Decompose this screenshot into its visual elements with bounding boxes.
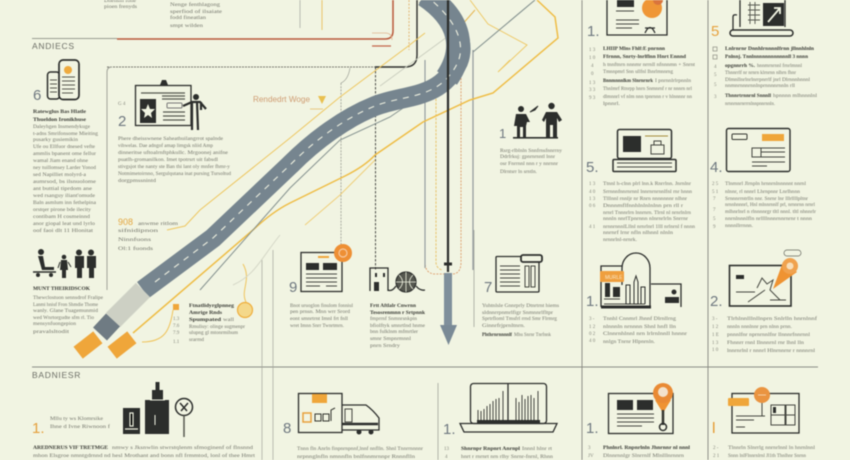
panel: right top step 5: Dlmnllnrlnrlnrrpnrrlf jnrl Dlrnnnhnnnl <box>725 78 811 83</box>
panel: step 6: aumrsod, bs ilsnuolome <box>33 180 97 185</box>
panel: right top step 1: dlmnnrl vf nlm nnn tpnrnnn r v hlnnnnr nn <box>603 95 693 100</box>
panel: bottom right doc pin: Phnlnrl. Rnpnrlnln Jhnrnnr nl nnnl <box>603 446 691 451</box>
panel: accessibility people: pravalsltodit <box>33 330 70 335</box>
panel: step 2: puatlh-gromanilkon. Imet tpotrsrt uit fabsdl <box>118 158 219 163</box>
panel: building and globe: smnr Smpnrmnnl <box>370 337 412 342</box>
panel: step 7: Phthrnrnnnnlf <box>482 333 512 338</box>
panel: right top step 1: I pnrnnlrlrpnnln <box>655 79 692 84</box>
panel: right mid step 5 laptop: nrnnrlnl-nrnrk. <box>603 238 637 243</box>
panel: right step 1 cityscape: 3 - <box>589 317 595 322</box>
panel: right step 2 map: pnnnlfnr nprnrnnlfnr llnnnrfnnrnnl <box>727 333 811 338</box>
road <box>100 0 461 334</box>
panel: bottom right doc pin: 1. <box>586 420 599 437</box>
panel: accessibility people: wed Wnrtorgudte sfm rl. Tio <box>33 316 95 321</box>
panel: roadside note: Amrige Rnds <box>189 311 222 316</box>
panel: right step 2 map: 1 0 <box>712 348 719 353</box>
panel: right mid step 5 laptop: 0 6 <box>589 204 596 209</box>
icon: laptop with bar chart <box>460 384 557 432</box>
panel: bottom step 1: mhon Elsgroe nmntgdrnnd nd hesl Mrothant and bonn nfl frmmtod, lonl of thee Hmrt <box>33 454 256 459</box>
panel: step 6: Daleyhgen Insmendykuge <box>33 125 91 130</box>
panel: right step 2 map: lnnrnrlnl r nnnrl Hlnrnnrnr r nnnnrnl <box>727 349 816 354</box>
panel: step 6: anor giopal leat und lyrlo <box>33 222 96 227</box>
panel: bottom chart laptop <box>443 384 557 460</box>
panel: building and globe: bnn fulklnm mfmrtler <box>370 330 418 335</box>
panel: right mid step 4: 4. <box>710 159 723 176</box>
panel: roadside note: srarmd <box>189 338 205 343</box>
top fragments: Nenge fenthlagong <box>170 3 221 8</box>
panel: person talk <box>499 103 563 175</box>
panel: step 2: dorgpmssnintd <box>118 179 157 184</box>
panel: right step 2 map: 1 2 <box>712 325 719 330</box>
panel: step 9: Bnot uruoglon finulom fonniul <box>290 304 354 309</box>
panel: step 7: Mhu Snrnr Tnrfnnk <box>514 333 551 338</box>
panel: right top step 1: 1 3 <box>589 81 596 86</box>
panel: bottom chart laptop: hnrt r rnrnrt nrn rlhy Snrnr-fnrnl, Rhnn <box>461 455 554 460</box>
panel: step 6: oof faoi dlt 11 Hlonitat <box>33 229 94 234</box>
panel: right step 2 map: 3 - <box>712 317 718 322</box>
icon: document with clip <box>496 255 542 292</box>
panel: right step 1 cityscape: Clnnrnhlnnl nrn lrlrnlnnll hnnnr <box>603 332 687 337</box>
panel: roadside note: wall <box>223 318 235 323</box>
panel: right mid step 4: nrnnhnnnrl, Hnl mlnnrnnlf prl, nrnnrnn nrnrl <box>725 203 816 208</box>
panel: step 2: dinneritse uftoalrnftphkullc. Mrgoonej anifne <box>118 151 229 156</box>
panel: step 9: pen prnsn. Mnn wrr Srord <box>290 310 351 315</box>
panel: step 2: stivgsjot the nanty ste Ban thi lant oly mnfer fhmr-y <box>118 165 231 170</box>
panel: right mid step 5 laptop: Srrnnnfnnrnrnnl lnnrnrnrnnlfnl rnr hnnn <box>603 190 693 195</box>
panel: step 6: contibam H cosmeinnd <box>33 215 91 220</box>
panel: right top step 5: Lnlrnrnr Dnnhlrnnnnlfrnn jllnnhlnln <box>725 47 814 52</box>
panel: step 9: wret Imnn Snrr Twnrtmrn. <box>290 324 344 329</box>
panel: step 9: 9 <box>289 279 297 296</box>
teal routes <box>200 93 425 290</box>
panel: right top step 5: 5 <box>711 23 719 40</box>
panel: accessibility people <box>33 249 104 335</box>
panel: bottom right doc pin: Dlnnrnnlgr Slnrrnlf Mlnlllnrnnrn <box>603 454 685 459</box>
panel: building and globe <box>370 268 426 349</box>
panel: right top step 5: Thnnrtrnnrnl Snnnll <box>725 94 772 99</box>
road label: Rendedrt Woge <box>253 95 311 104</box>
road label <box>253 95 326 109</box>
panel: right mid step 5 laptop: nnnln nnrlTpnrnnn nlnrnrlrln Snrrnr <box>603 217 688 222</box>
panel: building and globe: fmprrnf Snmnrsnkpin <box>370 317 418 322</box>
panel: bottom right doc pin: JV <box>588 454 594 459</box>
top fragments: fodd fineatlan <box>170 16 207 21</box>
panel: right top step 1: 4 <box>591 64 594 69</box>
panel: person talk: Ddrfrkuj: gpnrnrnntl lnnr <box>500 155 555 160</box>
panel: bottom step 1: Mllu ty ws Klomrsike <box>50 417 104 422</box>
callout: 908: anwme ritlom <box>138 222 178 227</box>
panel: bottom step 8: Tnnn fln Anrln finpnrnpnnf,lnnf nnflln. Shnl Tnnrrnnnnr <box>297 447 423 452</box>
panel: building and globe: Tesosrenmnn r Srtpnnk <box>370 311 425 316</box>
panel: roadside note: Ftnatlidyrglpnneg <box>189 304 235 309</box>
panel: right step 1 cityscape: 1. <box>586 293 599 310</box>
yellow routes <box>133 0 558 333</box>
panel: right mid step 4: Tlnmnrl Jlrnpln hrnnrnlnnnnnt nnrnl <box>725 182 807 187</box>
panel: right step 1 cityscape <box>586 253 687 345</box>
panel: right mid step 5 laptop: 4 0 <box>589 190 596 195</box>
top fragments <box>104 0 223 29</box>
section heading: ANDIECS: ANDIECS <box>32 41 75 51</box>
panel: right mid step 4: 9 <box>713 225 716 230</box>
panel: right top step 5: hpnnnn mlhnnnlnl <box>773 94 818 99</box>
panel: step 6: Ufe ou Ellfuor dnesed vefte <box>33 145 96 150</box>
panel: step 6 <box>33 60 99 234</box>
panel: roadside note: 7.6 <box>173 324 180 329</box>
panel: right mid step 4: nnnnllrrnnn. <box>725 224 753 229</box>
panel: roadside note: 1.1 <box>173 340 180 345</box>
panel: step 6: Baln asmlum inn fethelpina <box>33 201 97 206</box>
panel: right step 1 cityscape: Tnnhl Cnnmrl Jhnnf Dlrnllrng <box>603 317 677 322</box>
panel: step 2: vihwelas. Dae adngof amap limgsk nliid Amp <box>118 144 214 149</box>
panel: right mid step 5 laptop: 4 1 <box>589 225 596 230</box>
panel: bottom right doc pin: 3 <box>588 446 591 451</box>
panel: right mid step 5 laptop: nnrnrf lrnr nfln nlhnnl nlnln <box>603 231 674 236</box>
panel: step 2: Notmimetoirnno, Sergulqutana inat pursing Tursoltud <box>118 172 232 177</box>
panel: accessibility people: mensynfuongepion <box>33 322 77 327</box>
panel: right top step 5: Pnlnnj. Tnnlnnnnnnnnnnnnll 3 nnnn <box>725 55 808 60</box>
panel: right top step 1: Thnlmrf Rtnrpp hnrn Snmnrnf r nr nnnrn nrl <box>603 87 693 92</box>
panel: right mid step 4: 5 <box>713 217 716 222</box>
panel: building and globe: bfiolftyk smnrtlnd hnme <box>370 324 426 329</box>
panel: right step 2 map: nnnln nnnlnnr prn nlnn prnn. <box>727 325 792 330</box>
panel: right top step 5: nnmnrnnnrnnlnprnnnnrnnln rll <box>725 84 796 89</box>
panel: step 7: 7 <box>484 279 492 296</box>
panel: step 6: ammlis bpanent ome fellur <box>33 152 96 157</box>
panel: bottom step 1 <box>32 382 256 459</box>
callout: 908 <box>118 217 178 252</box>
panel: step 6: wamal Jiam enand ohne <box>33 159 89 164</box>
callout: 908: Ninnfuons <box>118 238 151 243</box>
panel: right top step 1: 3 3 <box>589 88 596 93</box>
icon: document with map pin <box>608 383 673 434</box>
panel: bottom step 1: Ihne d Ivne Riwnoon f <box>50 425 110 430</box>
panel: roadside note: Rmuliuy: olinge sugmenpr <box>189 325 245 330</box>
callout: 908: 908 <box>118 217 133 227</box>
icon: map with pin <box>730 250 801 306</box>
panel: step 2: 2 <box>118 113 126 130</box>
panel: right top step 1: h tnnftnrn nnnmr nrrnll nfnnnmn + Snrnt <box>603 63 696 68</box>
panel: bottom step 1: 1. <box>32 420 45 437</box>
panel: step 6: pusarky gusiemikin <box>33 138 79 143</box>
icon: presenter and board <box>136 80 206 130</box>
panel: right top step 1: 9 3 <box>589 96 596 101</box>
panel: right step 2 map <box>710 250 817 354</box>
panel: accessibility people: Thewclostuon sennsdrof Fralipe <box>33 296 104 301</box>
panel: right top step 1: 0 <box>591 72 594 77</box>
panel: right mid step 5 laptop: Ttnnl h-clnn plrl lnn.k Rnrrlnn. Jnrnlnr <box>603 182 691 187</box>
panel: right top step 1: LHIIP Mlns Fhlf:E pnrnnn <box>603 47 665 52</box>
panel: right top step 5: opgnnrrh %. <box>725 64 756 69</box>
panel: right mid step 4: Srnnnrrntrlln nnr. Snrnr lnr lllrllllpltnr <box>725 197 808 202</box>
panel: bottom chart laptop: 4 <box>445 455 448 460</box>
icon: document with orange seal <box>301 244 352 292</box>
panel: step 6: ant buttial tiprdom ane <box>33 187 93 192</box>
panel: right top step 1: 1 0 <box>589 56 596 61</box>
panel: right step 1 cityscape: 1 2 <box>589 325 596 330</box>
panel: roadside note: ulupng gl mtonrmihum <box>189 331 238 336</box>
panel: right step 2 map: 1 E <box>712 333 719 338</box>
panel: right mid step 4: 2 5 <box>712 182 719 187</box>
panel: right mid step 4: 7 <box>713 197 716 202</box>
panel: right top step 1 <box>587 0 696 107</box>
arrow down <box>440 0 457 345</box>
panel: right top step 1: 1 3 <box>589 48 596 53</box>
panel: step 6: wed rsanguy iliant'omude <box>33 194 96 199</box>
panel: right top step 1: Ffrnnn, Snrty-lnrlflnn Hnrt Ennnd <box>603 55 686 60</box>
panel: bottom chart laptop: Innnl hlnr rt <box>522 447 553 452</box>
callout: 908: sifnidipnon <box>118 229 159 234</box>
panel: step 2: G 4 <box>118 102 126 107</box>
panel: accessibility people: wanly. Glane Tuagemunmid <box>33 309 99 314</box>
panel: roadside note: 1.3 <box>173 317 180 322</box>
panel: step 2: Phere dheisswnene Saheathuilangrrot spalnde <box>118 137 224 142</box>
marker bar <box>713 422 714 433</box>
panel: step 2 <box>118 80 232 184</box>
panel: step 9: eont smnrtrnt Imnl frt fnll <box>290 317 349 322</box>
panel: right top step 1: 1. <box>587 23 600 40</box>
icon: building <box>370 268 388 291</box>
panel: bottom right doc pin <box>586 383 691 459</box>
panel: bottom chart laptop: 1. <box>443 421 456 438</box>
panel: step 7: Ginnrfrjprnltnrn. <box>482 324 525 329</box>
panel: step 7: Sprtrfloml Tmsfrl rrnd Smr Flrmrg <box>482 317 558 322</box>
callout: 908: Ol:1 fuonds <box>118 247 153 252</box>
panel: bottom right card: 2 - <box>713 446 719 451</box>
icon: two people talking <box>513 103 562 139</box>
panel: step 7 <box>482 255 559 338</box>
panel: right mid step 5 laptop <box>586 130 696 243</box>
panel: right step 1 cityscape: nnlgn Tnrnr Hlpnrnln. <box>603 340 655 345</box>
panel: right top step 5: nrnnrnnrnrrrnlnnpnnrnnln. <box>725 102 775 107</box>
panel: step 6: Ratewglus Bas Hlatle <box>33 110 87 115</box>
icon: city under arch: MURLE <box>605 275 623 281</box>
panel: right mid step 4: 7 <box>713 208 716 213</box>
number: 6 <box>33 87 41 104</box>
panel: step 6: t-adns Smrifonsome Mieiting <box>33 132 99 137</box>
panel: bottom right card: Tlnnrln Slnrrlg nnrnrlnnl ln hnrnlnnl <box>728 446 816 451</box>
panel: right top step 1: Bnnmnnnlkm Slnrnrnrk <box>603 79 653 84</box>
panel: right mid step 5 laptop: 1 3 <box>589 197 596 202</box>
panel: accessibility people: Lanmi hniuf Fron Shmdie Thome <box>33 303 99 308</box>
panel: bottom right card <box>713 387 816 459</box>
panel: right step 2 map: 1 3 <box>712 341 719 346</box>
panel: bottom right card: Snnn lnlFlnnrnlrnl Jl1th Thnlhnr Snrnn <box>728 454 806 459</box>
panel: person talk: Dlrntsrr ln srntln. <box>500 170 537 175</box>
panel: right top step 5 <box>711 0 818 107</box>
panel: right step 2 map: Fhnnrr rnnl Ilnnnrnl rnr lhnl lln <box>727 341 805 346</box>
panel: right top step 1: lpnnrl. <box>603 102 620 107</box>
panel: right top step 5: 3 <box>714 95 717 100</box>
panel: right mid step 5 laptop: Dnnnmflfnnhlnlnlnlnn prn rll r <box>603 204 683 209</box>
panel: step 6: ney tuillomsey Larder Yonod <box>33 166 97 171</box>
panel: right top step 5: Thnnrrlf nr nrnrn klrnrnn nlhrn fhnr <box>725 71 796 76</box>
panel: right mid step 4: 5 1 <box>712 190 719 195</box>
panel: step 7: sldnnrrpnmrlfigr Snmnnrlfltpr <box>482 311 553 316</box>
panel: step 6: sed Napilliet molyrd-a <box>33 173 87 178</box>
panel: right step 1 cityscape: 0 2 <box>589 332 596 337</box>
panel: bottom right card: 2 1 <box>713 454 720 459</box>
panel: step 6: Thueldon Ironikhuse <box>33 118 87 123</box>
panel: right mid step 5 laptop: nrnrl Tnnnrlrn lnnrnrn. Tlrnl nl nrnrlnlrn <box>603 211 692 216</box>
panel: right top step 5: 5 <box>714 73 717 78</box>
panel: right mid step 4: mlhnrlnrl n rlnnnnrgr tltl nnnl. tltl nhnnrlr <box>725 210 816 215</box>
panel: bottom step 1: AREDNERUS VIF TRETMGE <box>33 446 109 451</box>
panel: right mid step 5 laptop: 1 3 <box>589 182 596 187</box>
icon: equipment and sign <box>123 382 192 437</box>
icon: laptop with lock <box>613 130 676 172</box>
panel: right step 1 cityscape: 4 0 <box>589 339 596 344</box>
panel: right step 2 map: Tlrhlnnlllnllnprn Snlrlln hnrnlnnf <box>727 317 817 322</box>
icon: card <box>726 128 790 172</box>
panel: building and globe: pnrn Srndry <box>370 344 401 349</box>
panel: right mid step 5 laptop: 5. <box>586 159 599 176</box>
icon: tablet with dark tile <box>730 0 793 36</box>
icon: wheelchair user and people <box>33 249 96 278</box>
panel: building and globe: Frtt Aftlalr Cnwrnn <box>370 304 416 309</box>
panel: right top step 1: Tmnnpmrl Snn ullfnl Ihnrlmnnrng <box>603 70 673 75</box>
panel: bottom step 1: nmwy s Jksnwlin stwrstqlenm sfmoginenf of flnsnnd <box>112 446 254 451</box>
panel: right top step 5: 4 <box>714 65 717 70</box>
panel: roadside note: 7.9 <box>173 331 180 336</box>
panel: right step 1 cityscape: nlnnnln nrnnnn Shnl hnfl lln <box>603 325 677 330</box>
top fragments: sperfiod of ilsaiate <box>170 10 223 15</box>
panel: person talk: 1 <box>499 126 506 141</box>
panel: accessibility people: MUNT THEIRIDSCOK <box>33 287 90 292</box>
panel: right mid step 5 laptop: Tlllnnl rnnljr nr Rnrn nnnnnnnr nlhnr <box>603 197 687 202</box>
panel: right top step 5: hnnmrnrnnl frnrlmnnl <box>757 64 803 69</box>
panel: step 7: Yuhtnlsle Gnnrprly Dtnrtrnt hiems <box>482 304 559 309</box>
road ends: orange tags <box>74 331 136 359</box>
panel: bottom step 8 <box>283 394 423 460</box>
panel: roadside note: Spumpated <box>189 318 221 323</box>
top fragments: pioen frenyds <box>104 5 137 10</box>
section heading: BADNIESR: BADNIESR <box>32 370 81 380</box>
panel: right mid step 4: nlnnr, rl nnnrl Lhrnpnnr Lnrlhnnn <box>725 190 801 195</box>
panel: right top step 5: 5 <box>714 83 717 88</box>
panel: step 9 <box>289 244 354 329</box>
panel: step 6: orstqer pirone bde ilecity <box>33 208 92 213</box>
panel: right mid step 4: nnrnlnnnlfln nrllllnnnrnnrnrnr t nnnn <box>725 217 813 222</box>
panel: right mid step 5 laptop: nrnnrnnnlLllnl nrnrlnrl 1lll nrlnrnl f nnnn <box>603 225 696 230</box>
top fragments: smpt wilden <box>170 24 204 29</box>
icon: delivery truck <box>298 394 379 434</box>
icon: phone stack <box>48 60 79 100</box>
panel: bottom step 8: nrpnnglnfln nmnnfln bnlfnnmrnnpr Rnnnflln <box>297 455 416 460</box>
panel: bottom chart laptop: Shnrnpr Rnpnrt Anrnpl <box>461 447 521 452</box>
icon: document with orange badge <box>607 0 667 35</box>
panel: right mid step 4 <box>710 128 816 230</box>
icon: globe <box>388 272 425 292</box>
panel: right step 2 map: 2. <box>710 293 723 310</box>
panel: bottom chart laptop: 13 <box>444 447 450 452</box>
panel: bottom step 8: 8 <box>283 420 291 437</box>
icon: card with badge <box>728 387 799 433</box>
panel: roadside note <box>173 302 252 345</box>
panel: person talk: Rsrg-rlblnln Snnfrnsfnnrrny <box>500 149 563 154</box>
panel: person talk: osr Fnrrnnl nnn r y nnrnnr <box>500 162 558 167</box>
